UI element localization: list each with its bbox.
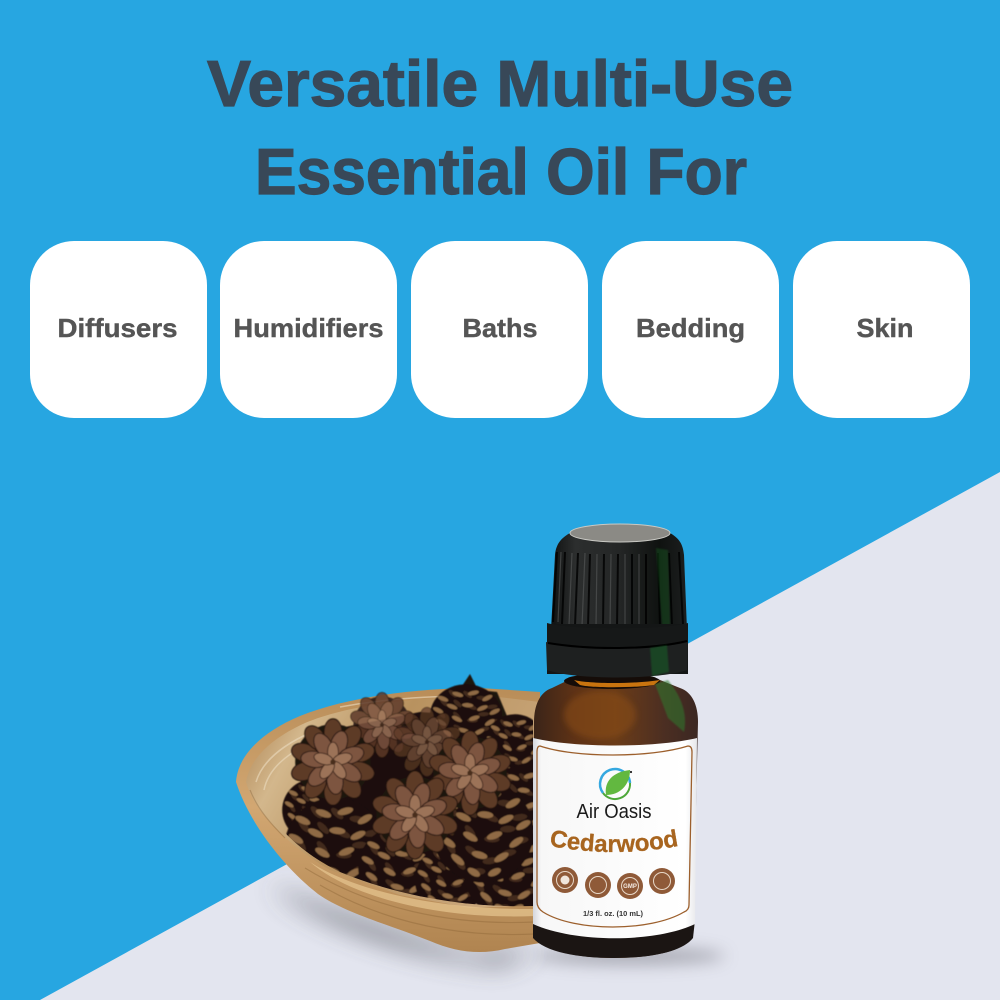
- volume text: 1/3 fl. oz. (10 mL): [583, 911, 643, 918]
- title: Essential Oil For: [255, 135, 747, 208]
- use cards row: [30, 241, 970, 418]
- brand logo: [600, 769, 632, 799]
- essential oil bottle: [533, 524, 698, 958]
- card: Humidifiers: [220, 241, 397, 418]
- product shadows: [270, 885, 725, 965]
- certification badges: GMP: [623, 884, 637, 890]
- card: Bedding: [602, 241, 779, 418]
- card: Skin: Skin: [856, 313, 914, 343]
- black dropper cap: [546, 524, 688, 678]
- card: Baths: [411, 241, 588, 418]
- label border: [537, 746, 692, 927]
- wooden bowl: [236, 688, 540, 952]
- card: Diffusers: Diffusers: [58, 313, 178, 343]
- card: Humidifiers: Humidifiers: [234, 313, 384, 343]
- title: Versatile Multi-Use: [207, 47, 793, 120]
- white label: [533, 738, 697, 938]
- brand name: Air Oasis: [576, 801, 652, 823]
- title: [207, 47, 793, 208]
- card: Bedding: Bedding: [636, 313, 745, 343]
- pine cones: [281, 674, 533, 906]
- certification badges: [552, 867, 675, 899]
- amber glass body: [533, 672, 698, 958]
- card: Baths: Baths: [462, 313, 538, 343]
- card: Skin: [793, 241, 970, 418]
- product name: Cedarwood: [551, 828, 678, 852]
- card: Diffusers: [30, 241, 207, 418]
- bowl of pine cones: [236, 674, 565, 952]
- light grey diagonal panel: [40, 472, 1000, 1000]
